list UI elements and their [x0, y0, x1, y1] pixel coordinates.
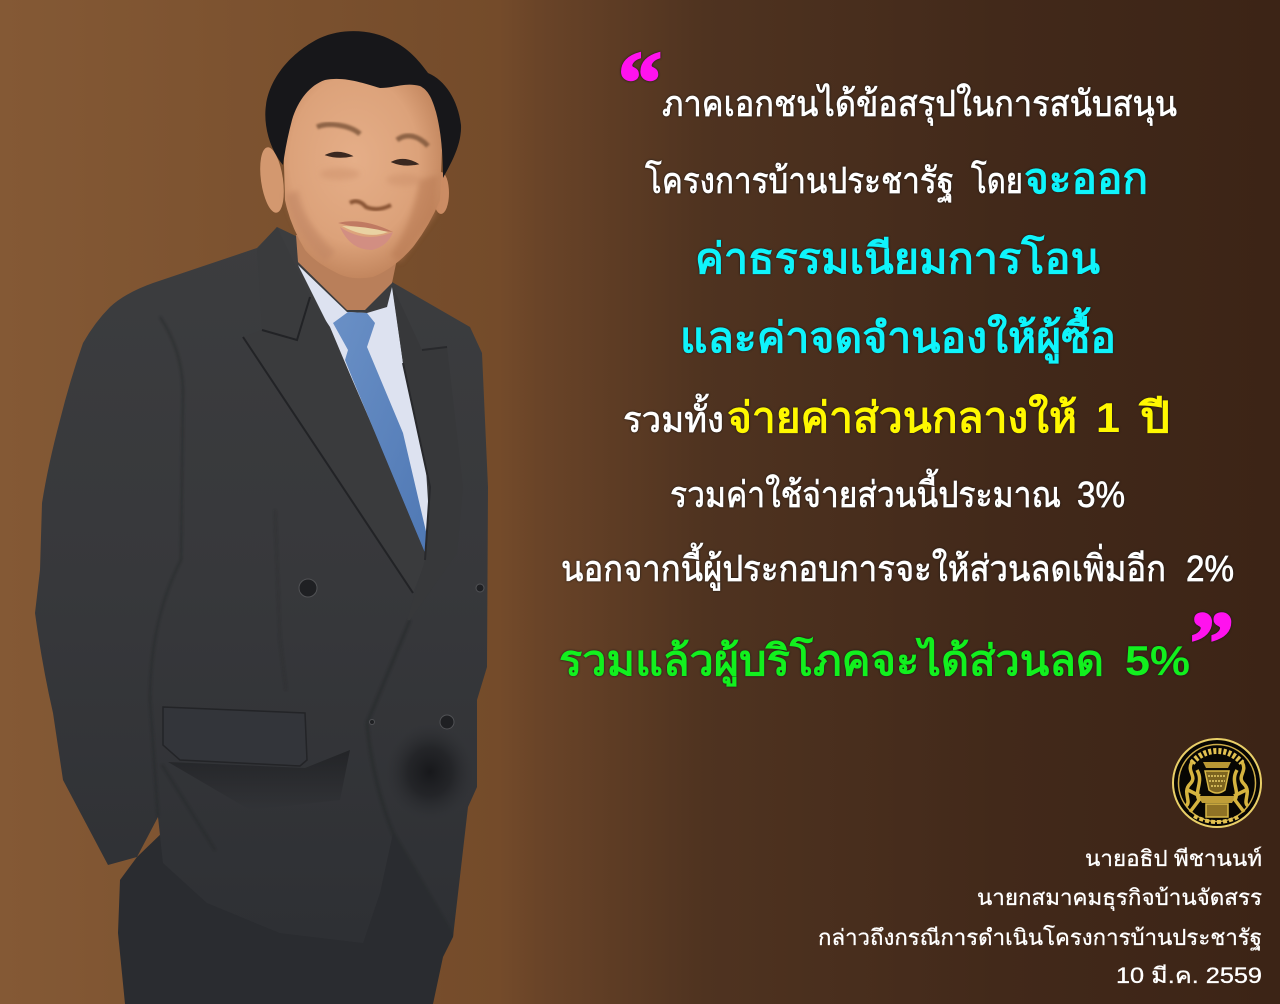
face shading — [285, 168, 438, 262]
right lapel — [392, 285, 463, 620]
line 7: นอกจากนี้ผู้ประกอบการจะให้ส่วนลดเพิ่มอีก — [561, 542, 1166, 591]
jacket pocket flap — [163, 707, 307, 766]
hair — [265, 31, 461, 178]
left lapel — [243, 227, 425, 593]
government seal — [1173, 739, 1261, 827]
quote mark: opening: “ — [618, 35, 662, 132]
portrait: man in dark suit — [35, 31, 488, 1004]
white shirt — [298, 265, 430, 552]
left lapel edges — [243, 297, 413, 593]
jacket folds and seams — [160, 318, 410, 700]
line 5 — [623, 393, 1170, 441]
right lapel edges — [403, 347, 447, 560]
line 3: ค่าธรรมเนียมการโอน — [695, 234, 1100, 282]
line 4: และค่าจดจำนองให้ผู้ซื้อ — [680, 306, 1116, 364]
line 8: รวมแล้วผู้บริโภคจะได้ส่วนลด — [559, 636, 1104, 687]
line 7: 2% — [1186, 548, 1234, 589]
face — [283, 74, 442, 278]
quote text — [559, 83, 1234, 687]
line 2: จะออก — [1024, 155, 1148, 202]
line 2: โดย — [971, 160, 1023, 201]
speaker title: นายกสมาคมธุรกิจบ้านจัดสรร — [977, 885, 1262, 911]
speaker name: นายอธิป พีชานนท์ — [1085, 846, 1262, 871]
line 8: 5% — [1125, 637, 1190, 684]
blue tie — [333, 312, 428, 553]
quote mark: closing: ” — [1190, 595, 1234, 692]
line 1: ภาคเอกชนได้ข้อสรุปในการสนับสนุน — [662, 83, 1177, 126]
context: กล่าวถึงกรณีการดำเนินโครงการบ้านประชารัฐ — [818, 925, 1262, 951]
line 5: ปี — [1138, 394, 1170, 441]
line 5: 1 — [1096, 394, 1120, 441]
line 5: รวมทั้ง — [623, 393, 724, 440]
right ear — [433, 172, 449, 214]
line 6: 3% — [1077, 474, 1125, 515]
attribution — [818, 846, 1262, 988]
jacket buttons — [299, 579, 484, 729]
date: 10 มี.ค. 2559 — [1116, 963, 1262, 988]
line 6: รวมค่าใช้จ่ายส่วนนี้ประมาณ — [670, 468, 1061, 515]
jacket shading — [160, 318, 459, 803]
line 5: จ่ายค่าส่วนกลางให้ — [727, 393, 1077, 441]
trousers — [118, 790, 460, 1004]
jacket — [35, 227, 488, 943]
neck — [296, 235, 402, 310]
line 2: โครงการบ้านประชารัฐ — [645, 160, 954, 203]
left ear — [257, 146, 287, 214]
line 2 — [645, 155, 1148, 203]
eyes, brows, nose, mouth — [317, 125, 428, 250]
